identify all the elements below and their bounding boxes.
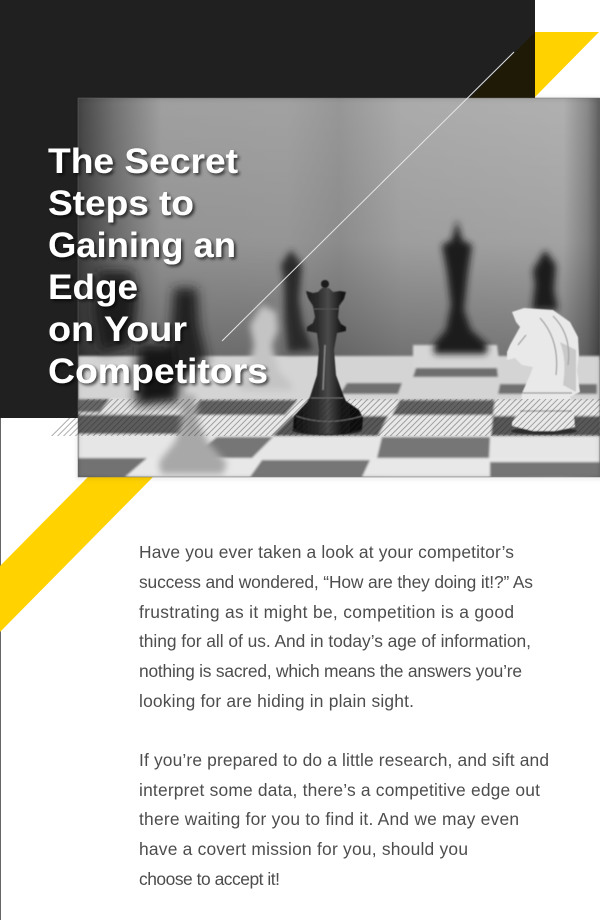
chess board — [78, 345, 600, 477]
intro paragraph: thing for all of us. And in today’s age of information, — [139, 631, 531, 651]
title — [48, 142, 268, 391]
intro paragraph: Have you ever taken a look at your competitor’s — [139, 542, 514, 562]
intro paragraph: success and wondered, “How are they doing it!?” As — [139, 572, 533, 592]
diagonal hatch overlay — [47, 399, 600, 436]
intro paragraph: frustrating as it might be, competition is a good — [139, 602, 514, 622]
yellow diagonal band — [0, 477, 153, 632]
second paragraph: interpret some data, there’s a competitive edge out — [139, 780, 540, 800]
second paragraph: choose to accept it! — [139, 869, 280, 889]
second paragraph: there waiting for you to find it. And we may even — [139, 809, 519, 829]
second paragraph: If you’re prepared to do a little research, and sift and — [139, 750, 549, 770]
knight piece — [507, 308, 580, 434]
title: on Your — [48, 310, 187, 349]
chess photo — [78, 98, 600, 477]
title: Gaining an — [48, 226, 236, 265]
second paragraph — [139, 750, 549, 889]
second paragraph: have a covert mission for you, should you — [139, 839, 468, 859]
queen piece — [292, 280, 363, 435]
title: Edge — [48, 268, 138, 307]
photo edge shadow — [78, 98, 600, 477]
left page edge — [0, 418, 1, 920]
blurred back pieces — [281, 220, 558, 354]
blurred front pawn — [159, 395, 227, 474]
dark header block — [0, 0, 535, 418]
title: Steps to — [48, 184, 194, 223]
yellow corner triangle — [535, 32, 599, 97]
blurred left pieces — [93, 272, 207, 406]
dark olive shadow triangle — [470, 32, 535, 98]
intro paragraph: looking for are hiding in plain sight. — [139, 691, 414, 711]
thin diagonal line — [222, 52, 514, 341]
intro paragraph: nothing is sacred, which means the answers you’re — [139, 661, 522, 681]
intro paragraph — [139, 542, 533, 711]
blurred white pawn — [240, 305, 292, 390]
title: The Secret — [48, 142, 238, 181]
title: Competitors — [48, 352, 268, 391]
